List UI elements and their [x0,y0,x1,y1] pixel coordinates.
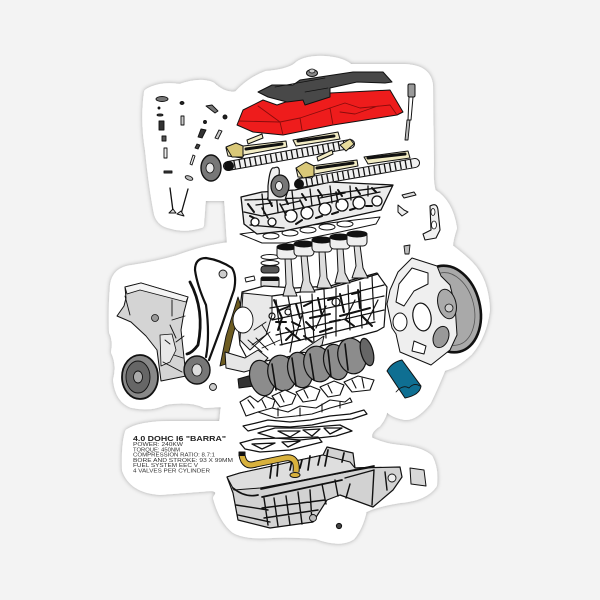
small plate [410,468,426,486]
spark plugs and injectors [247,134,354,161]
intake cam sprocket [201,155,221,181]
rail one [226,141,287,158]
sump gasket upper [258,425,352,440]
rail three [296,160,358,178]
chain guide left [187,282,200,354]
tensioner and small bolts [210,270,255,390]
crank sprocket [184,356,210,384]
spec lines: TORQUE: 450NM [133,448,180,454]
front timing cover [117,283,188,381]
piston 2 [294,241,315,292]
piston 3 [312,237,332,288]
drain bolt [336,523,342,529]
chain guide right [220,297,241,366]
sticker white die-cut silhouette [112,59,487,541]
spec lines: COMPRESSION RATIO: 8.7:1 [133,452,215,458]
exhaust cam sprocket and mount [268,167,289,200]
spec lines: 4 VALVES PER CYLINDER [133,468,210,474]
camshaft rear [294,163,415,188]
oil filter [387,360,421,398]
specification text block [133,436,233,474]
head gasket [240,217,380,243]
pistons and connecting rods [277,231,368,296]
valvetrain small parts [156,96,227,181]
flywheel [408,259,490,359]
ignition coil [405,84,415,140]
oil pickup pipe [239,452,300,478]
valves [169,188,188,216]
oil filler cap [306,69,318,76]
camshaft front [224,144,350,170]
spec lines: BORE AND STROKE: 93 X 99MM [133,458,233,464]
oil pan [227,447,402,528]
piston 1 [277,244,297,296]
cam carrier rails [226,132,410,178]
piston 5 [347,231,368,278]
cylinder head [241,182,393,234]
main bearing caps [240,376,374,418]
spec lines: POWER: 240KW [133,442,183,448]
sump gasket lower [240,437,322,452]
flexplate adapter [387,258,459,365]
oil pump gasket chain [243,410,367,431]
sensors and brackets near head [398,192,440,254]
timing chain [195,258,235,360]
rail four [364,151,410,164]
engine block [225,273,387,372]
crank pulley [122,355,158,399]
spec lines: FUEL SYSTEM EEC V [133,463,199,469]
piston 4 [330,234,350,283]
crankshaft [238,335,376,398]
dark ignition cover [258,72,392,105]
engine parts [117,69,490,529]
red valve cover [237,90,403,135]
spec title: 4.0 DOHC I6 "BARRA" [133,436,226,443]
spec lines [133,442,233,474]
rail two [293,132,340,146]
piston rings [261,254,279,288]
